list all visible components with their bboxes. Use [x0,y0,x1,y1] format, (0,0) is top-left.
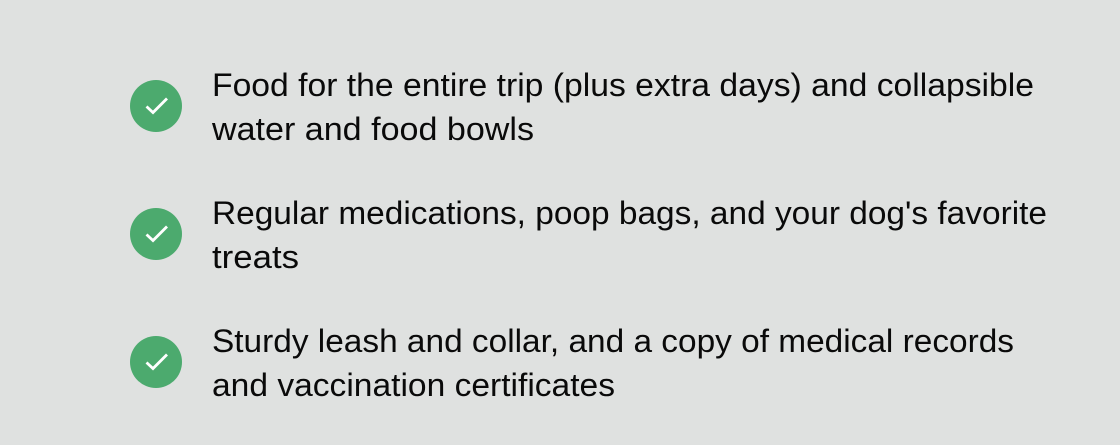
icon: green check circle [130,336,182,388]
text: medications and treats [212,195,1047,275]
text: leash and records: Sturdy leash and collar, and a copy of medical records [212,323,1014,359]
checklist item: medications and treats [130,195,1047,275]
text: food and bowls [211,67,1034,147]
icon: green check circle [130,208,182,260]
text: medications and treats: treats [212,239,299,275]
text: medications and treats: Regular medications, poop bags, and your dog's favorite [212,195,1047,231]
checklist item: leash and records [130,323,1014,403]
text: leash and records: and vaccination certificates [212,367,615,403]
text: food and bowls: Food for the entire trip (plus extra days) and collapsible [212,67,1034,103]
text: food and bowls: water and food bowls [211,111,534,147]
checklist item: food and bowls [130,67,1034,147]
text: leash and records [212,323,1014,403]
icon: green check circle [130,80,182,132]
